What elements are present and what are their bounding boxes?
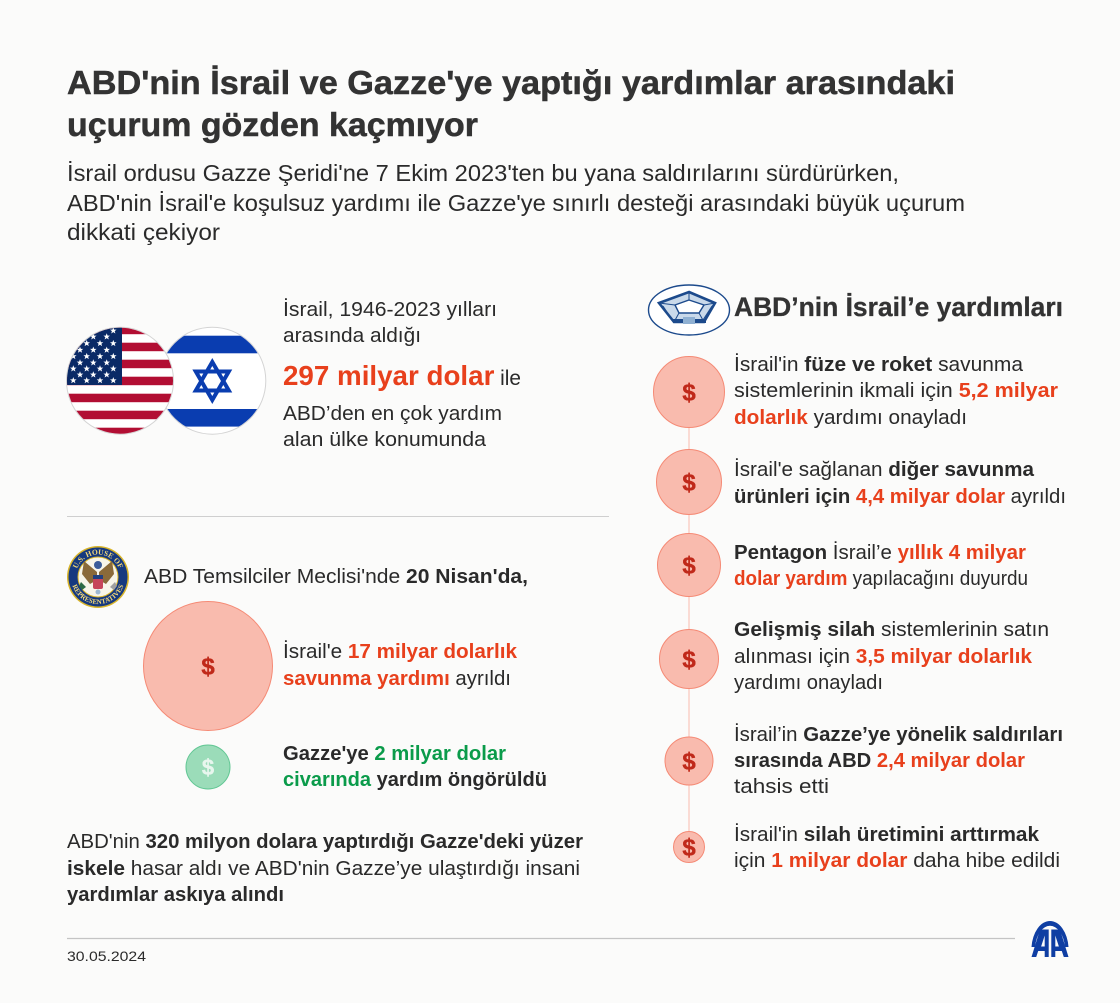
item: 1 billion: $ (682, 834, 696, 862)
text: total aid to Israel: alan ülke konumunda (283, 429, 487, 451)
item: 1 billion (674, 823, 1060, 872)
text: total aid to Israel: 297 milyar dolar ile (283, 360, 521, 391)
item: 4.4 billion: ürünleri için 4,4 milyar dolar ayrıldı (734, 486, 1066, 508)
title (67, 64, 955, 143)
bubble: 2 billion to Gaza: $ (202, 755, 214, 780)
item: 2.4 billion: İsrail’in Gazze’ye yönelik saldırıları (734, 723, 1063, 746)
item: 4.4 billion: İsrail'e sağlanan diğer savunma (734, 458, 1035, 481)
text: floating pier note: yardımlar askıya alındı (67, 884, 284, 906)
item: 5.2 billion: $ (682, 380, 696, 406)
item: 3.5 billion: yardımı onayladı (734, 672, 883, 694)
text: House of Representatives date: ABD Temsilciler Meclisi'nde 20 Nisan'da, (144, 566, 528, 588)
item: 5.2 billion: İsrail'in füze ve roket savunma (734, 353, 1024, 376)
item: 4.4 billion: $ (682, 470, 696, 496)
bubble: 17 billion to Israel (144, 602, 272, 730)
icon: US House of Representatives seal: U.S. HOUSE OF (72, 550, 124, 568)
item: 5.2 billion: dolarlık yardımı onayladı (734, 407, 967, 429)
item: 2.4 billion (665, 723, 1063, 798)
item: 5.2 billion (654, 353, 1058, 429)
text: floating pier note (67, 831, 583, 906)
item: 2.4 billion: sırasında ABD 2,4 milyar dolar (734, 750, 1025, 772)
icon: AA logo (1032, 921, 1068, 957)
item: 2.4 billion: tahsis etti (734, 776, 829, 798)
text: Israel 17 billion (283, 640, 518, 690)
subtitle text block: ABD'nin İsrail'e koşulsuz yardımı ile Gazze'ye sınırlı desteği arasındaki büyük uçurum (67, 190, 965, 216)
timeline connector (688, 392, 690, 847)
icon: US and Israel flags (60, 325, 270, 436)
text: Gaza 2 billion (283, 743, 547, 791)
icon: US flag (66, 326, 174, 435)
subtitle text block: dikkati çekiyor (67, 219, 220, 245)
subtitle text block: İsrail ordusu Gazze Şeridi'ne 7 Ekim 2023'ten bu yana saldırılarını sürdürürken, (67, 160, 899, 186)
title: ABD'nin İsrail ve Gazze'ye yaptığı yardımlar arasındaki (67, 64, 955, 101)
item: 3.5 billion (660, 619, 1049, 694)
text: Gaza 2 billion: civarında yardım öngörüldü (283, 769, 547, 791)
icon: US House of Representatives seal (67, 546, 129, 608)
bubble: 2 billion to Gaza (186, 745, 230, 789)
item: 1 billion: için 1 milyar dolar daha hibe edildi (734, 850, 1060, 872)
text: floating pier note: ABD'nin 320 milyon dolara yaptırdığı Gazze'deki yüzer (67, 831, 583, 853)
subtitle text block (67, 160, 965, 245)
item: 4 billion yearly: dolar yardım yapılacağını duyurdu (734, 568, 1028, 590)
text: Israel 17 billion: İsrail'e 17 milyar dolarlık (283, 640, 518, 663)
bubble: 17 billion to Israel: $ (201, 654, 215, 680)
date: 30.05.2024 (67, 948, 146, 964)
text: total aid to Israel: ABD’den en çok yardım (283, 403, 502, 425)
icon: Israel flag (166, 326, 266, 435)
text: floating pier note: iskele hasar aldı ve ABD'nin Gazze’ye ulaştırdığı insani (67, 858, 580, 880)
item: 3.5 billion: Gelişmiş silah sistemlerinin satın (734, 619, 1049, 641)
text: total aid to Israel: arasında aldığı (283, 325, 421, 347)
item: 3.5 billion: alınması için 3,5 milyar dolarlık (734, 646, 1033, 668)
item: 1 billion: İsrail'in silah üretimini arttırmak (734, 823, 1040, 846)
item: 2.4 billion: $ (682, 748, 696, 776)
item: 4.4 billion (656, 450, 1066, 514)
text: total aid to Israel (283, 298, 521, 451)
item: 4 billion yearly (658, 534, 1028, 596)
item: 3.5 billion: $ (682, 646, 696, 674)
icon: Pentagon seal (648, 285, 730, 335)
icon: US House of Representatives seal: REPRESENTATIVES (72, 584, 124, 604)
heading: US aid to Israel: ABD’nin İsrail’e yardımları (734, 292, 1063, 322)
title: uçurum gözden kaçmıyor (67, 106, 478, 143)
item: 4 billion yearly: $ (682, 552, 696, 580)
item: 5.2 billion: sistemlerinin ikmali için 5,2 milyar (734, 380, 1058, 402)
text: total aid to Israel: İsrail, 1946-2023 yılları (283, 298, 497, 321)
item: 4 billion yearly: Pentagon İsrail’e yıllık 4 milyar (734, 541, 1026, 564)
text: Israel 17 billion: savunma yardımı ayrıldı (283, 668, 511, 690)
text: Gaza 2 billion: Gazze'ye 2 milyar dolar (283, 743, 506, 765)
